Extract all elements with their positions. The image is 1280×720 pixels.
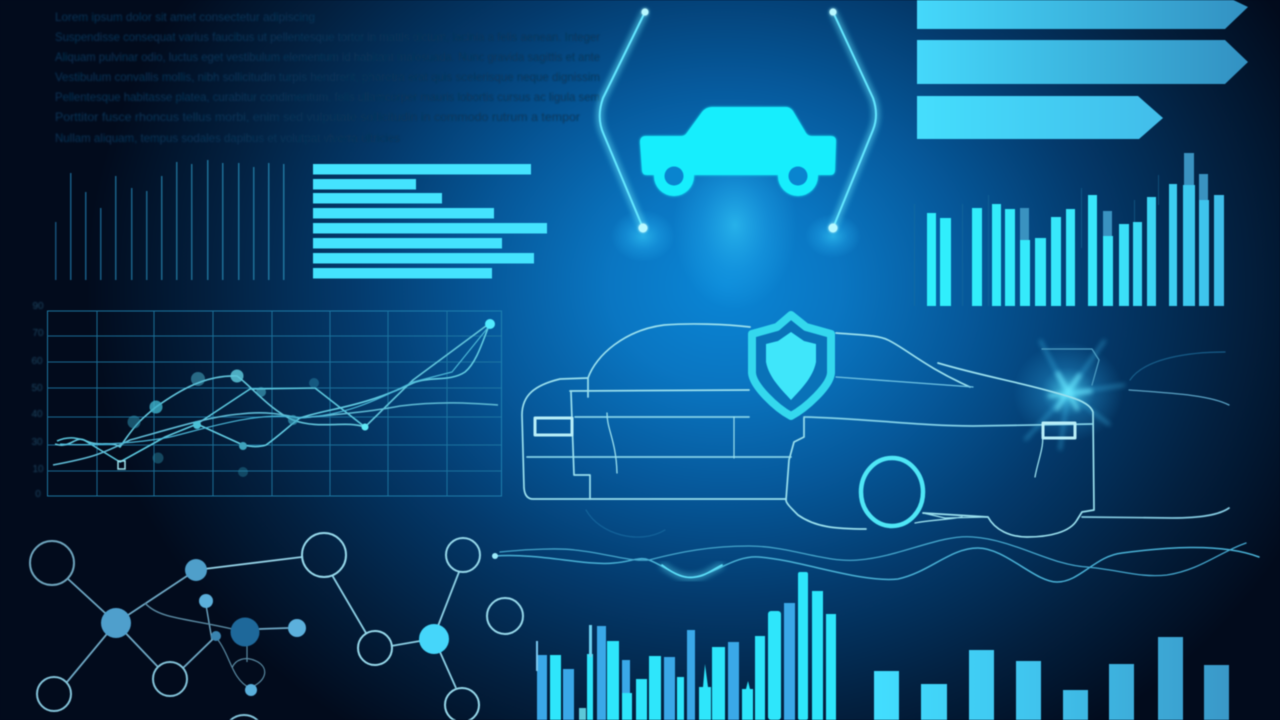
chart: upper right bar chart (914, 153, 1224, 306)
axis labels: 10 (32, 464, 44, 475)
chart: flowing wave lines (492, 537, 1259, 582)
text block: blurred report copy: Aliquam pulvinar odio, luctus eget vestibulum elementum id habitant malesuada. Nunc gravida sagittis et ante (55, 50, 600, 64)
bracket end points (638, 8, 838, 232)
text block: blurred report copy (55, 10, 600, 145)
links (67, 557, 459, 688)
left glowing bracket (600, 12, 645, 228)
text block: blurred report copy: Suspendisse consequat varius faucibus ut pellentesque tortor in mattis dictum, lacinia a felis aenean. Integer (55, 30, 600, 44)
network diagram (30, 533, 523, 720)
icon: car silhouette with brackets (600, 8, 876, 232)
chart: lower right bar chart (874, 637, 1229, 720)
right glowing bracket (833, 12, 876, 228)
chart: multi-line trend (31, 301, 502, 500)
chart: horizontal bars (313, 164, 547, 278)
axis labels: 60 (31, 356, 43, 367)
icon: shield (752, 315, 831, 416)
axis labels: 40 (31, 409, 43, 420)
axis labels: 50 (31, 383, 43, 394)
car body (640, 107, 836, 196)
wheel hubs (664, 166, 684, 186)
text block: blurred report copy: Lorem ipsum dolor sit amet consectetur adipiscing (55, 10, 315, 24)
filled nodes (101, 559, 449, 696)
chart: lower centre bar chart (536, 572, 836, 720)
chart: thin vertical lines (55, 160, 284, 280)
light flare on car hood (1013, 340, 1125, 450)
tail light (535, 418, 572, 435)
open nodes (30, 533, 523, 720)
axis labels (31, 301, 44, 500)
text block: blurred report copy: Nullam aliquam, tempus sodales dapibus et volutpat viverra ultricies (55, 131, 400, 145)
data points (118, 319, 495, 477)
series lines (53, 323, 498, 465)
axis labels: 90 (32, 301, 44, 312)
axis labels: 0 (35, 489, 41, 500)
text block: blurred report copy: Pellentesque habitasse platea, curabitur condimentum, felis ullamcorper mauris lobortis cursus ac ligula sem (55, 90, 600, 104)
headlight (1043, 423, 1075, 438)
car body lines (588, 324, 750, 397)
illustration: car outline (522, 324, 1229, 537)
chart: arrow banners (917, 0, 1248, 139)
text block: blurred report copy: Vestibulum convallis mollis, nibh sollicitudin turpis hendrerit, pharetra erat quis scelerisque neque dignissim (55, 70, 600, 84)
wheel (861, 458, 923, 526)
grid (47, 311, 502, 496)
axis labels: 30 (31, 437, 43, 448)
glow behind car icon (611, 140, 861, 310)
axis labels: 70 (32, 328, 44, 339)
text block: blurred report copy: Porttitor fusce rhoncus tellus morbi, enim sed vulputate sollicitudin in commodo rutrum a tempor (55, 110, 580, 124)
